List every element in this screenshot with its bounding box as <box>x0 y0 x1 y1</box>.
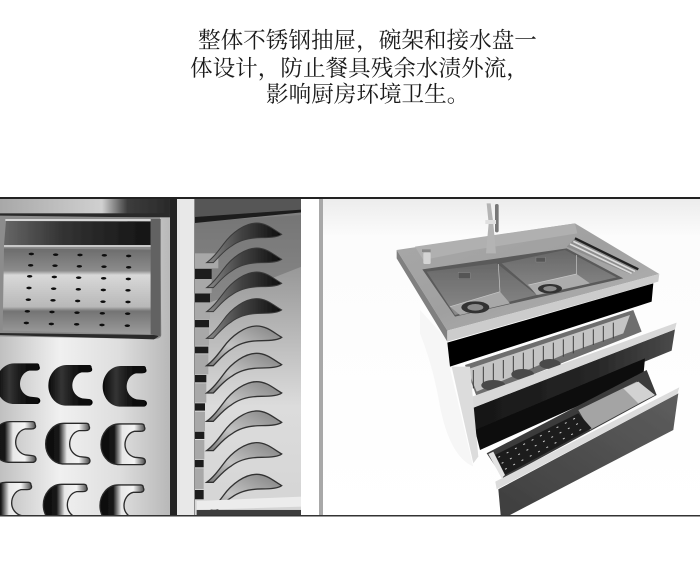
rack shadow slats <box>195 269 212 499</box>
rack plate <box>195 195 302 520</box>
panel: middle photo of dish rack fins <box>195 195 302 520</box>
upper shading <box>195 215 302 308</box>
left basin <box>427 263 537 315</box>
heading line 2: 体设计，防止餐具残余水渍外流， <box>190 56 529 81</box>
lower drawer front <box>498 393 678 515</box>
upper drawer rack wires <box>473 323 613 388</box>
basins rim <box>422 248 623 317</box>
lower drawer interior <box>487 370 657 478</box>
tray back wall <box>4 221 151 247</box>
panel: right product photo <box>323 199 700 515</box>
heading line 1: 整体不锈钢抽屉，碗架和接水盘一 <box>198 28 537 53</box>
cutouts row 3 <box>0 482 144 515</box>
dark fins <box>207 223 282 338</box>
roll-up rack <box>567 238 638 274</box>
white strip <box>301 199 319 515</box>
light vertical rail <box>177 199 194 515</box>
right basin <box>502 250 617 295</box>
panel: photo backdrop <box>0 198 700 516</box>
frame top rule <box>0 197 700 199</box>
upper drawer handle <box>470 323 677 408</box>
dark gap between photos <box>170 199 177 515</box>
cutouts row 1 <box>0 363 147 407</box>
cutouts row 2 <box>0 422 145 465</box>
frame bottom rule <box>0 515 700 516</box>
light fins <box>207 326 282 514</box>
rack bottom ledge <box>197 497 302 510</box>
cabinet side <box>446 340 473 466</box>
heading line 3: 影响厨房环境卫生。 <box>266 82 469 107</box>
drain holes <box>24 253 131 327</box>
grey strip <box>319 199 323 515</box>
steel plate <box>0 195 170 520</box>
photo strip <box>0 197 700 516</box>
soap dispenser <box>422 249 431 264</box>
drains <box>461 284 562 313</box>
lower drawer handle <box>495 387 679 489</box>
black gap between drawers <box>475 358 645 450</box>
lower drawer rack <box>495 413 592 475</box>
rack shelf slats <box>195 253 218 489</box>
upper drawer dishes <box>481 359 561 391</box>
black control band <box>447 283 653 367</box>
rack top bar <box>195 199 302 218</box>
upper drawer front <box>472 329 675 432</box>
countertop front edge <box>447 274 659 342</box>
panel: left photo of perforated tray and cutouts <box>0 195 170 526</box>
top bar <box>0 198 170 214</box>
countertop deck <box>397 223 659 331</box>
tray floor <box>3 248 151 334</box>
faucet <box>485 203 499 253</box>
upper drawer interior <box>465 310 642 397</box>
tray rim <box>0 216 161 339</box>
